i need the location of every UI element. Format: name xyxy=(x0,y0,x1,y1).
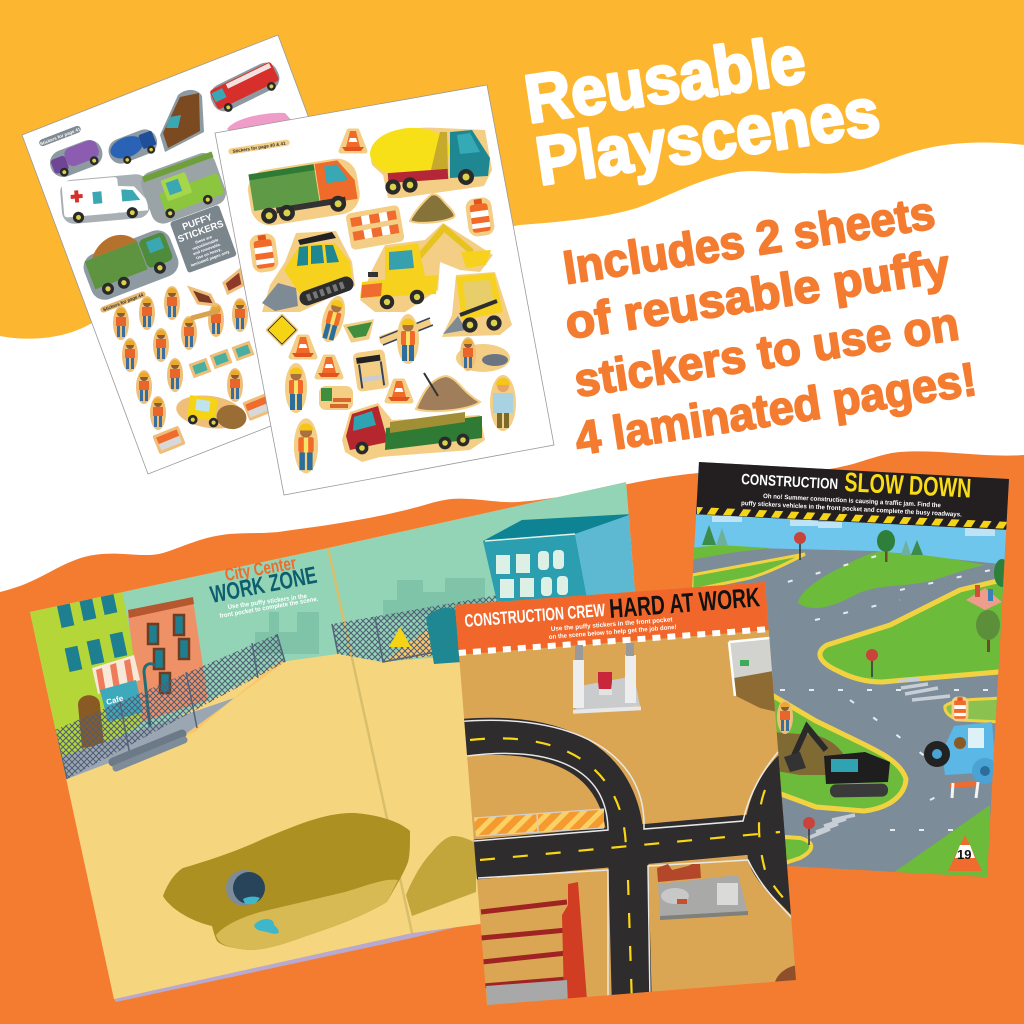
grey block xyxy=(486,980,568,1008)
panel: puffy stickers note: repositionable xyxy=(192,237,220,251)
corner grass xyxy=(894,805,990,877)
cafe storefront xyxy=(92,655,143,722)
salmon building xyxy=(128,600,208,722)
dirt patch xyxy=(776,732,844,775)
chain link fence right xyxy=(332,595,498,662)
book heading xyxy=(208,553,319,620)
slow down heading: puffy stickers vehicles in the front pocket and complete the busy roadways. xyxy=(741,500,962,519)
sticker: cone xyxy=(341,131,365,151)
skyline xyxy=(255,578,485,654)
portable toilet xyxy=(426,608,462,664)
sticker: dirt pile xyxy=(410,194,455,223)
lower center green xyxy=(760,688,906,811)
sticker: green dump truck xyxy=(76,217,183,304)
sticker: dirt with shovel xyxy=(416,373,480,411)
sticker: barrel xyxy=(464,196,496,238)
ground xyxy=(68,654,480,999)
door xyxy=(78,695,104,748)
book heading: front pocket to complete the scene. xyxy=(219,596,319,620)
chain link fence left xyxy=(55,634,285,779)
dirt corner xyxy=(775,965,800,985)
stop signs xyxy=(794,532,878,845)
description text: Includes 2 sheets xyxy=(560,185,938,294)
sticker: worker at manhole xyxy=(456,337,510,372)
picnic blanket and kids xyxy=(966,585,1002,610)
sticker: excavator xyxy=(360,223,493,312)
page: Construction Crew Hard at Work xyxy=(450,578,800,1010)
crew heading: CONSTRUCTION CREW xyxy=(464,600,606,631)
bricks xyxy=(657,864,701,882)
background: yellow wave xyxy=(0,0,1024,339)
sticker: small barricades xyxy=(152,393,274,455)
lamp post xyxy=(144,664,155,727)
trees xyxy=(702,525,1010,652)
sticker: jackhammer worker xyxy=(294,418,318,473)
roads xyxy=(455,720,800,1010)
orange barrel xyxy=(952,697,968,721)
striped band xyxy=(458,629,770,653)
drain pipe xyxy=(226,870,265,906)
sticker: worker with shovel xyxy=(285,363,307,413)
sticker: road sign xyxy=(265,313,299,347)
orange barrier fence xyxy=(474,809,604,836)
panel: puffy stickers note: these are xyxy=(194,234,213,245)
background: orange wave xyxy=(0,451,1024,1024)
sticker: worker with ladder xyxy=(378,314,433,364)
title: Reusable xyxy=(520,21,810,138)
road base xyxy=(692,462,1009,877)
slow down heading xyxy=(741,467,972,519)
crew heading xyxy=(464,582,761,641)
construction fence patch xyxy=(945,698,1000,722)
book heading: WORK ZONE xyxy=(208,562,319,609)
crew heading: HARD AT WORK xyxy=(608,582,761,624)
small crew stickers xyxy=(113,270,253,430)
description text: 4 laminated pages! xyxy=(572,352,980,465)
cone page number xyxy=(948,835,982,871)
sticker: bulldozer xyxy=(262,231,355,312)
concrete slab xyxy=(658,875,748,920)
crosswalks xyxy=(808,679,950,838)
blue building xyxy=(483,514,649,602)
slow down heading: Oh no! Summer construction is causing a traffic jam. Find the xyxy=(763,493,941,509)
sticker: fire truck xyxy=(207,59,284,117)
fence yard patch xyxy=(180,662,285,738)
sky xyxy=(30,482,670,780)
page: Construction Slow Down xyxy=(692,462,1009,877)
crew heading: Use the puffy stickers in the front pocket xyxy=(551,616,674,633)
foundation block xyxy=(573,643,641,714)
stickers: small cones xyxy=(291,337,411,401)
book page stack edge xyxy=(114,916,481,1002)
red steel column xyxy=(562,882,587,1000)
book heading: Use the puffy stickers in the xyxy=(227,593,308,611)
hazard stripe xyxy=(697,507,1010,529)
pipes xyxy=(113,734,184,768)
cafe storefront: Cafe xyxy=(105,694,125,707)
panel: puffy stickers note: laminated pages only. xyxy=(190,249,231,268)
sticker: barricade xyxy=(345,205,405,250)
green building xyxy=(30,590,146,775)
sticker: man with map xyxy=(490,375,516,431)
hills xyxy=(690,545,770,560)
blue tractor xyxy=(924,722,998,784)
road barricade xyxy=(950,781,980,798)
spine fold xyxy=(328,548,412,933)
label: stickers for page 44: Stickers for page 44 xyxy=(102,292,144,312)
title xyxy=(520,21,884,200)
worker xyxy=(777,700,793,734)
sticker sheet: vehicles and crew (back) xyxy=(22,35,404,474)
sticker: bucket and bricks xyxy=(319,386,353,410)
black excavator xyxy=(784,727,890,798)
panel: puffy stickers note xyxy=(170,205,237,273)
label: stickers for page 40 and 41: Stickers for page 40 & 41 xyxy=(232,141,286,154)
book heading: City Center xyxy=(223,553,298,585)
sky xyxy=(690,510,1010,565)
fence yard right xyxy=(385,629,432,661)
panel: puffy stickers note: and removable. xyxy=(192,241,222,256)
slow down heading: CONSTRUCTION xyxy=(741,471,839,493)
sticker: barrel xyxy=(248,232,280,274)
road dashes xyxy=(780,555,990,831)
sticker: dump truck xyxy=(245,156,363,228)
panel: puffy stickers note: Use on heavy, xyxy=(195,247,222,260)
water puddle xyxy=(254,919,279,934)
excavated pit xyxy=(163,813,476,950)
description text: of reusable puffy xyxy=(562,238,953,349)
sticker: brown van xyxy=(160,90,204,152)
page: City Center Work Zone book spread xyxy=(30,482,635,1002)
sticker: sawhorse xyxy=(352,349,389,392)
slow down heading: SLOW DOWN xyxy=(844,467,972,504)
title: Playscenes xyxy=(531,74,884,200)
upper left grass wedge xyxy=(692,554,805,590)
panel: puffy stickers note: PUFFY xyxy=(181,212,214,233)
center green hill xyxy=(798,552,985,608)
description text: stickers to use on xyxy=(571,296,962,407)
steel beams xyxy=(481,902,567,986)
orange header xyxy=(450,578,770,655)
sticker: worker with wheelbarrow xyxy=(317,293,372,345)
sticker: cement mixer xyxy=(368,125,492,198)
warning sign xyxy=(389,627,411,647)
sidewalk xyxy=(61,698,234,779)
building corner xyxy=(729,636,790,715)
cone page number: 19 xyxy=(957,847,971,862)
sticker: small loader xyxy=(174,391,249,433)
sticker: blue mixer xyxy=(105,126,161,169)
right green area xyxy=(820,578,1010,682)
sticker: ambulance xyxy=(59,173,151,225)
sticker: flatbed truck xyxy=(342,403,485,462)
label: stickers for page 41: Stickers for page 41 xyxy=(39,126,81,146)
small yellow corner xyxy=(784,835,814,864)
header panel xyxy=(690,455,1015,530)
sticker: skid loader xyxy=(442,272,512,337)
sticker: green crane xyxy=(138,150,229,227)
sticker: pink vehicle xyxy=(227,113,293,135)
crew heading: on the scene below to help get the job done! xyxy=(549,624,677,641)
sticker sheet: construction vehicles (front) xyxy=(215,85,554,495)
sticker: purple garbage truck xyxy=(46,136,106,181)
description text xyxy=(560,185,980,465)
panel: puffy stickers note: STICKERS xyxy=(176,219,225,245)
